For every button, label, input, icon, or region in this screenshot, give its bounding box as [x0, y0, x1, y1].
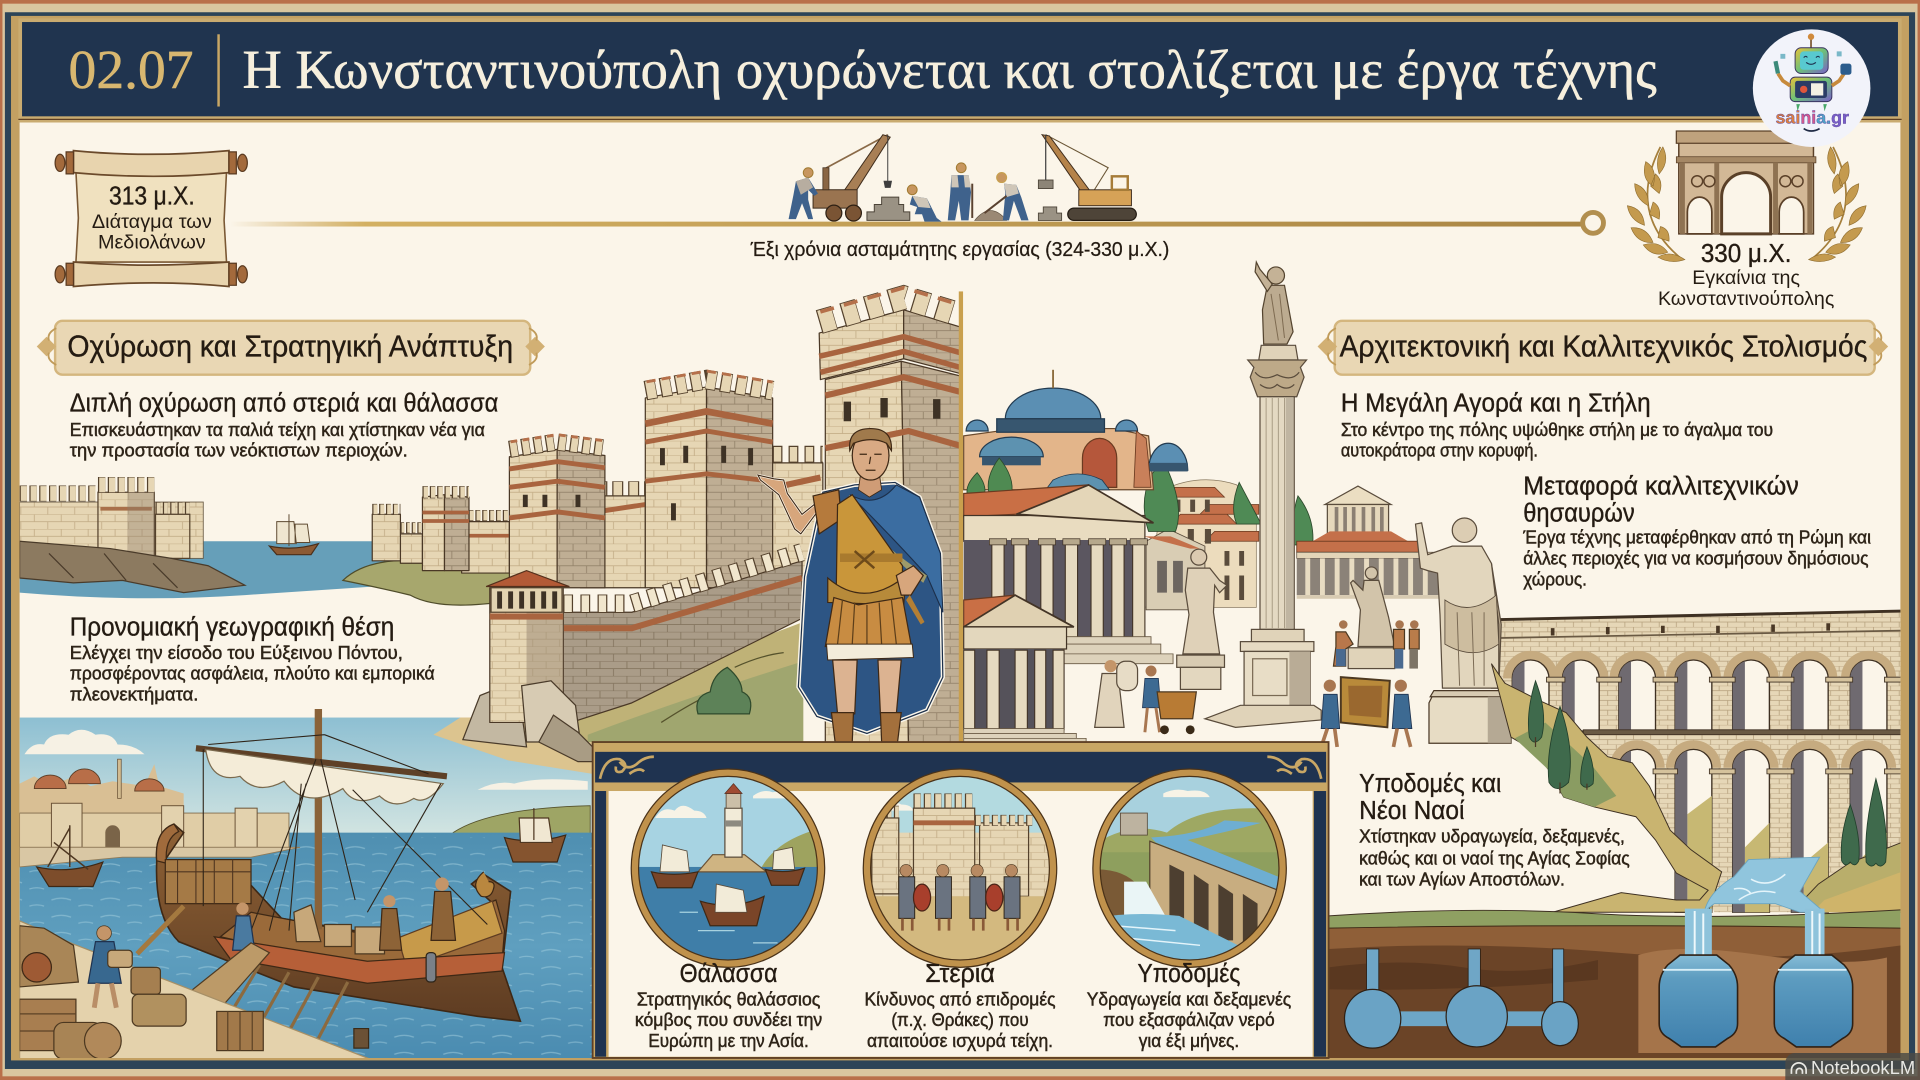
- caption: sea: Στρατηγικός θαλάσσιος: [637, 988, 821, 1009]
- text block: double fortification: την προστασία των νεόκτιστων περιοχών.: [70, 440, 408, 461]
- scroll: 313 AD: [55, 151, 247, 287]
- section heading: fortification: [37, 321, 545, 375]
- caption: land: [864, 960, 1056, 1051]
- caption: sea: κόμβος που συνδέει την: [635, 1009, 822, 1030]
- tower 1: [825, 361, 909, 747]
- main land wall towers: [372, 288, 960, 747]
- watermark: [1785, 1053, 1920, 1080]
- town behind forum: [1144, 460, 1261, 610]
- crane one: [813, 135, 910, 221]
- icon: construction scene: [789, 135, 1136, 222]
- watermark: NotebookLM: [1811, 1057, 1915, 1078]
- chapter number: 02.07: [69, 39, 193, 100]
- small far towers: [400, 534, 422, 563]
- distant coastline with small walls: [20, 485, 527, 605]
- column of Constantine: [1205, 262, 1321, 727]
- cuirass: [836, 495, 902, 600]
- text block: double fortification: [70, 389, 498, 461]
- text block: great forum and column: [1341, 389, 1773, 461]
- ornament corners: [600, 757, 1321, 779]
- caption: sea: [635, 960, 822, 1051]
- text block: geographic position: [70, 614, 435, 704]
- caption: land: Κίνδυνος από επιδρομές: [864, 988, 1056, 1009]
- far temple: [1292, 486, 1440, 599]
- milestone: 330 AD arch with laurels: Εγκαίνια της: [1692, 267, 1800, 289]
- statue being erected and workers: [1333, 567, 1419, 669]
- ground and underground cisterns: [1329, 857, 1902, 1060]
- text block: double fortification: Επισκευάστηκαν τα παλιά τείχη και χτίστηκαν νέα για: [70, 419, 485, 440]
- caption: infrastructure: Υποδομές: [1138, 960, 1240, 988]
- text block: geographic position: προσφέροντας ασφάλεια, πλούτο και εμπορικά: [70, 663, 435, 684]
- text block: geographic position: Ελέγχει την είσοδο του Εύξεινου Πόντου,: [70, 642, 403, 663]
- text block: great forum and column: Στο κέντρο της πόλης υψώθηκε στήλη με το άγαλμα του: [1341, 419, 1773, 440]
- caption: infrastructure: για έξι μήνες.: [1139, 1030, 1239, 1051]
- scroll: 313 AD: 313 μ.Χ.: [109, 182, 195, 210]
- medallion: infrastructure: [1100, 777, 1278, 960]
- small temple front: [964, 595, 1086, 743]
- center gold divider: [959, 291, 963, 742]
- Hagia Sophia: [964, 370, 1188, 495]
- medallion: land: [871, 777, 1049, 960]
- right illustration: city forum: [964, 262, 1902, 1060]
- caption: land: απαιτούσε ισχυρά τείχη.: [867, 1030, 1053, 1051]
- left illustration: walls and harbour: [20, 288, 960, 1060]
- lower sea wall and round tower: [433, 552, 803, 774]
- milestone: 330 AD arch with laurels: [1627, 131, 1866, 310]
- dock with cargo and porter: [20, 921, 373, 1060]
- panel: three advantages: [593, 742, 1329, 1058]
- scroll: 313 AD: Μεδιολάνων: [98, 232, 206, 254]
- harbour sky and sea: [20, 718, 593, 1060]
- text block: art treasures: χώρους.: [1523, 568, 1587, 589]
- robot: [1776, 34, 1851, 111]
- merchant ship: [137, 709, 520, 1038]
- text block: double fortification: Διπλή οχύρωση από στεριά και θάλασσα: [70, 389, 498, 417]
- milestone text: 330 μ.Χ.: [1701, 240, 1791, 268]
- medallion rings: [635, 773, 1283, 964]
- icon: laurel wreath: [1627, 147, 1866, 262]
- scroll: 313 AD: Διάταγμα των: [92, 211, 212, 233]
- caption: land: (π.χ. Θράκες) που: [891, 1009, 1029, 1030]
- distant harbour city: [20, 759, 300, 867]
- small ships: [37, 808, 566, 887]
- main temple: [964, 485, 1173, 664]
- cape: [798, 482, 943, 733]
- title: Η Κωνσταντινούπολη οχυρώνεται και στολίζεται με έργα τέχνης: [242, 39, 1657, 100]
- caption: infrastructure: [1087, 960, 1291, 1051]
- milestone: 330 AD arch with laurels: Κωνσταντινούπολης: [1658, 288, 1834, 310]
- text block: art treasures: άλλες περιοχές για να κοσμήσουν δημόσιους: [1523, 547, 1869, 568]
- wall sections: [580, 496, 645, 588]
- title banner: [18, 18, 1902, 122]
- text block: art treasures: Μεταφορά καλλιτεχνικών: [1523, 473, 1799, 501]
- text block: art treasures: [1522, 473, 1871, 589]
- text block: art treasures: Έργα τέχνης μεταφέρθηκαν από τη Ρώμη και: [1522, 527, 1871, 548]
- workers: [789, 163, 1029, 222]
- logo badge: [1753, 29, 1870, 147]
- section heading: architecture: [1318, 321, 1888, 375]
- medallion: sea: [639, 777, 817, 960]
- constantine figure: [758, 429, 943, 742]
- text block: infrastructure and churches: [1359, 770, 1630, 889]
- text block: infrastructure and churches: Νέοι Ναοί: [1359, 797, 1465, 825]
- text block: geographic position: Προνομιακή γεωγραφική θέση: [70, 614, 394, 642]
- text block: infrastructure and churches: Υποδομές και: [1359, 770, 1501, 798]
- section heading: fortification: Οχύρωση και Στρατηγική Ανάπτυξη: [67, 329, 513, 363]
- text block: infrastructure and churches: Χτίστηκαν υδραγωγεία, δεξαμενές,: [1359, 825, 1625, 846]
- timeline caption: Έξι χρόνια ασταμάτητης εργασίας (324-330 μ.Χ.): [750, 239, 1169, 261]
- logo badge: sainia.gr: [1776, 108, 1849, 128]
- porters with artworks: [1095, 660, 1412, 747]
- text block: great forum and column: Η Μεγάλη Αγορά και η Στήλη: [1341, 389, 1651, 417]
- hand and sword: [896, 566, 923, 595]
- caption: infrastructure: Υδραγωγεία και δεξαμενές: [1087, 988, 1291, 1009]
- text block: infrastructure and churches: καθώς και οι ναοί της Αγίας Σοφίας: [1359, 847, 1630, 868]
- timeline: [230, 212, 1603, 261]
- head: [858, 473, 882, 497]
- hillside with cypresses: [1491, 664, 1902, 912]
- aqueduct: [1500, 611, 1902, 912]
- caption: infrastructure: που εξασφάλιζαν νερό: [1103, 1009, 1275, 1030]
- text block: great forum and column: αυτοκράτορα στην κορυφή.: [1341, 440, 1538, 461]
- text block: infrastructure and churches: και των Αγίων Αποστόλων.: [1359, 868, 1565, 889]
- tower 3: [509, 449, 557, 588]
- caption: sea: Θάλασσα: [680, 960, 778, 988]
- section heading: architecture: Αρχιτεκτονική και Καλλιτεχνικός Στολισμός: [1340, 329, 1867, 363]
- tower 2: [645, 387, 707, 588]
- caption: sea: Ευρώπη με την Ασία.: [648, 1030, 809, 1051]
- text block: art treasures: θησαυρών: [1523, 500, 1635, 528]
- marble statue and pedestal: [1177, 549, 1227, 689]
- icon: triumphal arch: [1676, 131, 1816, 234]
- text block: geographic position: πλεονεκτήματα.: [70, 683, 198, 704]
- marble statue on right pedestal: [1416, 518, 1511, 743]
- pointing arm: [758, 475, 823, 534]
- crane two: [1038, 135, 1136, 220]
- caption: land: Στεριά: [925, 960, 995, 988]
- skirt: [825, 598, 911, 647]
